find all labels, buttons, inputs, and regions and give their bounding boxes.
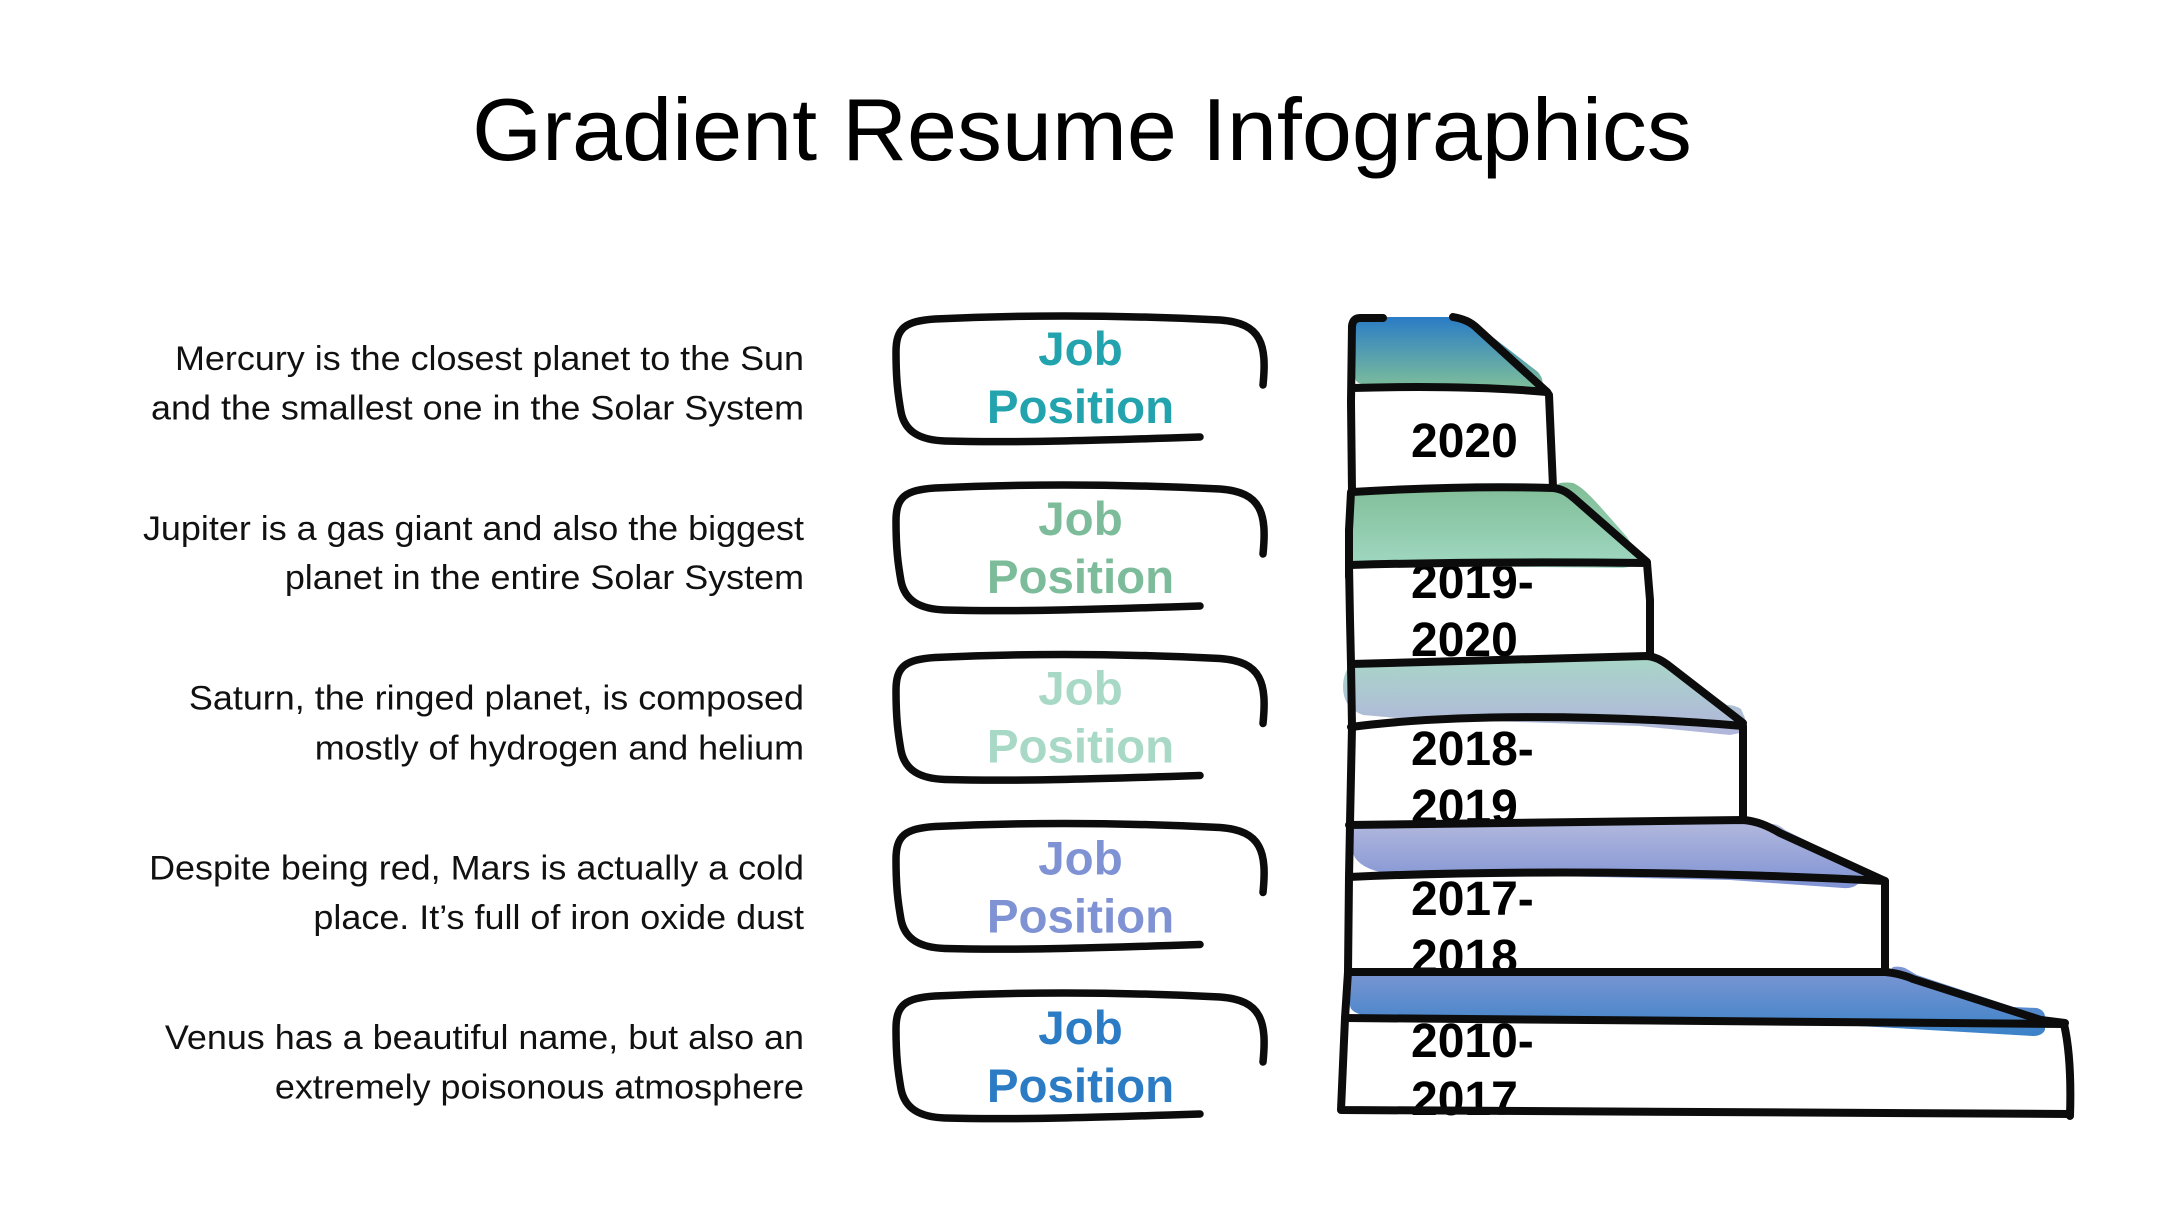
- job position box 2: Position: [987, 551, 1174, 604]
- job position box 3: Position: [987, 720, 1174, 774]
- stair step 2010-2017: 2017: [1411, 1073, 1518, 1126]
- text block: Mars: Despite being red, Mars is actually a cold: [149, 849, 804, 887]
- job position box 4: [896, 824, 1264, 949]
- stair step 2019-2020: 2020: [1411, 614, 1518, 667]
- job position box 5: Job: [1038, 1002, 1123, 1055]
- text block: Saturn: mostly of hydrogen and helium: [315, 729, 804, 767]
- stair step 2018-2019: 2018-: [1411, 723, 1534, 776]
- text block: Mercury: [151, 340, 804, 427]
- text block: Mars: [149, 849, 804, 937]
- stair step 2018-2019: [1343, 653, 1745, 834]
- job position box 3: [896, 655, 1264, 780]
- text block: Mars: place. It’s full of iron oxide dust: [313, 899, 804, 937]
- stair step 2019-2020: [1349, 482, 1650, 667]
- stair step 2017-2018: [1348, 820, 1886, 984]
- job position box 4: Job: [1038, 832, 1123, 886]
- job position box 1: Position: [987, 381, 1174, 434]
- stair step 2018-2019: 2019: [1411, 781, 1518, 834]
- stair step 2017-2018: 2017-: [1411, 873, 1534, 926]
- job position box 2: [896, 485, 1264, 611]
- stair step 2020: [1351, 317, 1553, 492]
- text block: Jupiter: planet in the entire Solar System: [285, 559, 804, 597]
- job position box 1: [896, 316, 1264, 442]
- text block: Jupiter: Jupiter is a gas giant and also the biggest: [143, 510, 804, 548]
- text block: Venus: [165, 1019, 804, 1106]
- job position box 3: Job: [1038, 662, 1123, 716]
- text block: Jupiter: [143, 510, 804, 597]
- stair step 2010-2017: 2010-: [1411, 1015, 1534, 1068]
- job position box 4: Position: [987, 890, 1174, 944]
- text block: Venus: extremely poisonous atmosphere: [275, 1068, 804, 1106]
- stair step 2017-2018: 2018: [1411, 931, 1518, 984]
- stair step 2010-2017: [1341, 967, 2070, 1126]
- text block: Venus: Venus has a beautiful name, but also an: [165, 1019, 804, 1057]
- job position box 2: Job: [1038, 493, 1123, 546]
- job position box 5: Position: [987, 1060, 1174, 1113]
- text block: Saturn: Saturn, the ringed planet, is composed: [189, 679, 804, 717]
- text block: Saturn: [189, 679, 804, 767]
- stair step 2020: 2020: [1411, 415, 1518, 468]
- stair step 2019-2020: 2019-: [1411, 556, 1534, 609]
- text block: Mercury: and the smallest one in the Solar System: [151, 389, 804, 427]
- title: Gradient Resume Infographics: [472, 80, 1692, 179]
- text block: Mercury: Mercury is the closest planet to the Sun: [175, 340, 804, 378]
- job position box 1: Job: [1038, 323, 1123, 376]
- job position box 5: [896, 993, 1264, 1119]
